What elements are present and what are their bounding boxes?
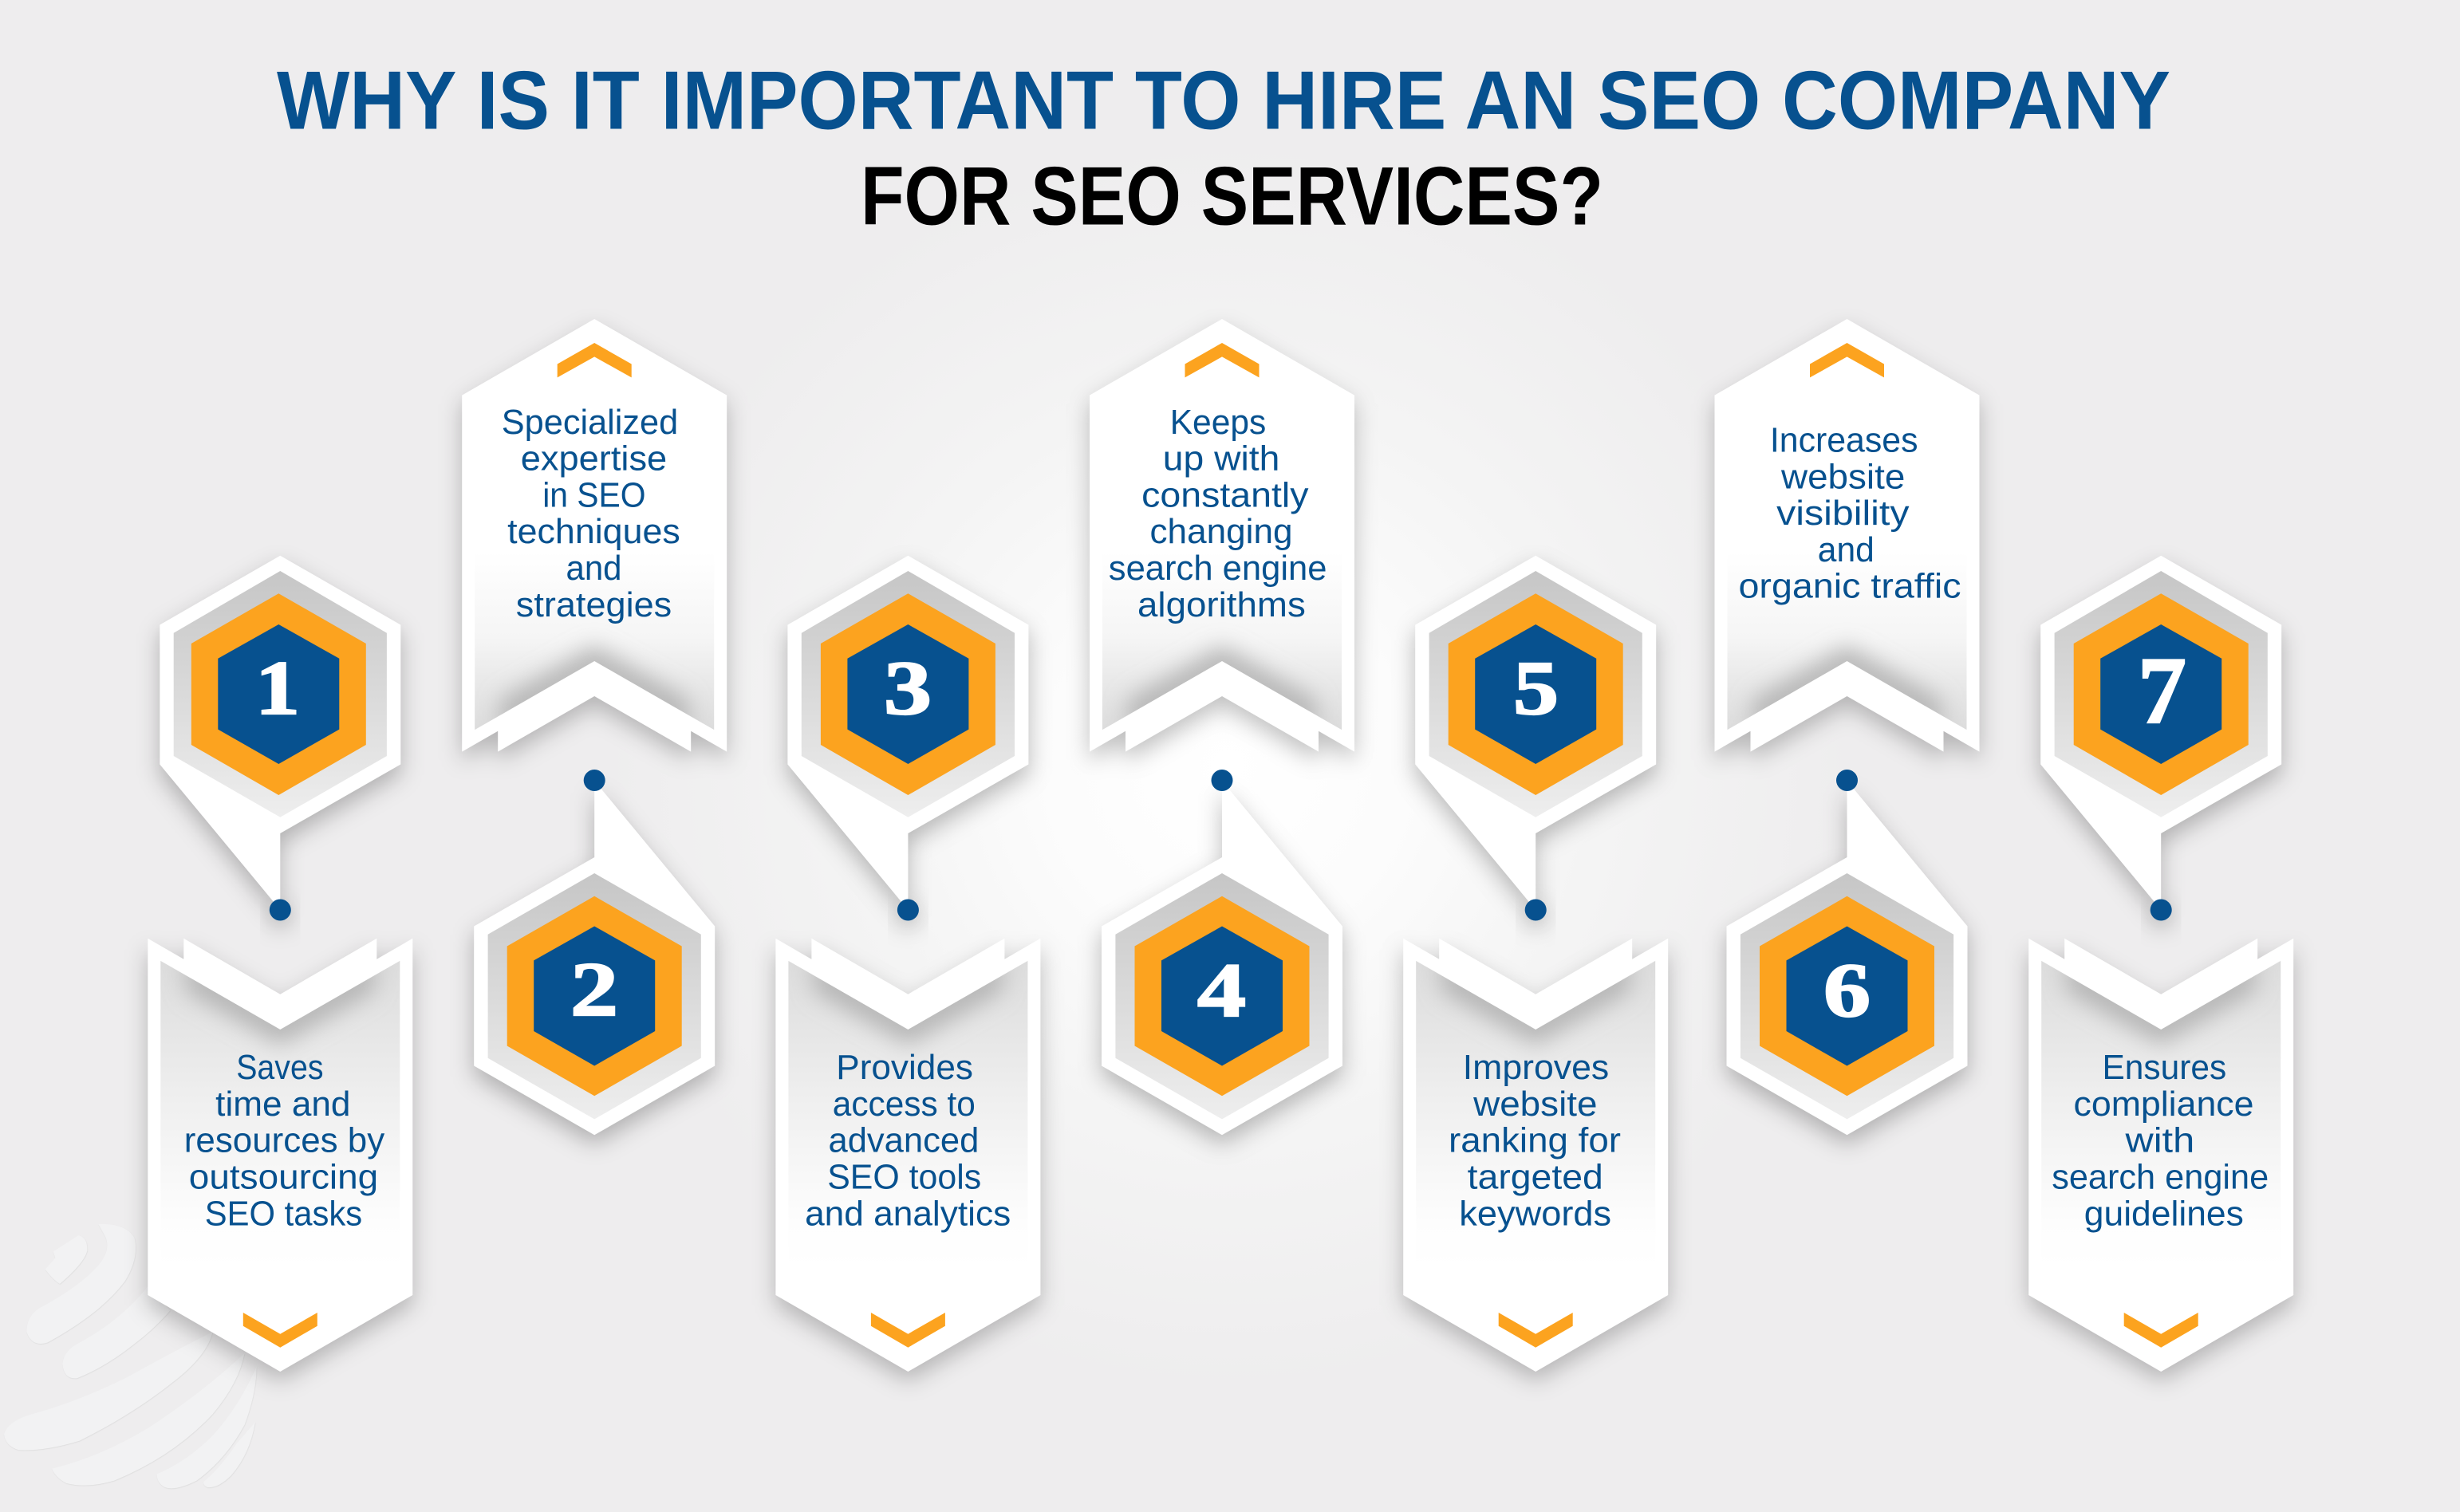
text: specialized expertise — [502, 403, 680, 624]
text: provides access: and analytics — [805, 1195, 1011, 1233]
text: provides access: advanced — [828, 1121, 979, 1160]
text: specialized expertise: Specialized — [502, 403, 678, 442]
hexagon pin 4 — [1102, 770, 1342, 1144]
text: improves ranking: Improves — [1463, 1048, 1609, 1087]
column 1 — [148, 556, 412, 1381]
text: keeps up: changing — [1150, 512, 1292, 551]
text: specialized expertise: in SEO — [542, 475, 646, 514]
text: specialized expertise: expertise — [521, 439, 667, 478]
text: saves time: Saves — [236, 1048, 324, 1087]
text: improves ranking: targeted — [1468, 1158, 1603, 1197]
text: improves ranking: ranking for — [1449, 1121, 1621, 1160]
text: keeps up: Keeps — [1170, 403, 1266, 442]
title — [277, 55, 2170, 243]
text: ensures compliance: with — [2124, 1121, 2194, 1160]
text: increases visibility: visibility — [1776, 494, 1910, 533]
text: saves time — [184, 1048, 384, 1233]
text: increases visibility: website — [1780, 457, 1905, 496]
title line 1: WHY IS IT IMPORTANT TO HIRE AN SEO COMPANY — [277, 55, 2170, 148]
decorative logo swirl — [4, 1224, 257, 1488]
text: ensures compliance — [2052, 1048, 2269, 1233]
column 3 — [775, 556, 1040, 1381]
text: increases visibility: organic traffic — [1739, 567, 1961, 606]
text: provides access — [805, 1048, 1011, 1233]
title line 2: FOR SEO SERVICES? — [861, 151, 1603, 243]
hexagon pin 2 — [474, 770, 715, 1144]
text: keeps up — [1109, 403, 1327, 624]
text: ensures compliance: compliance — [2074, 1085, 2254, 1124]
hexagon pin 7 — [2040, 556, 2281, 927]
column 6 — [1715, 319, 1980, 1144]
text: ensures compliance: search engine — [2052, 1158, 2269, 1197]
hexagon pin 6 — [1726, 770, 1967, 1144]
text: keeps up: algorithms — [1137, 585, 1306, 624]
ribbon panel 4 — [1090, 319, 1354, 762]
text: provides access: access to — [833, 1085, 976, 1124]
hexagon pin 6: 6 — [1823, 947, 1871, 1033]
text: increases visibility: Increases — [1770, 421, 1918, 460]
hexagon pin 3: 3 — [884, 645, 932, 730]
hexagon pin 7: 7 — [2138, 637, 2186, 743]
text: saves time: resources by — [184, 1121, 384, 1160]
ribbon panel 6 — [1715, 319, 1980, 762]
ribbon panel 3 — [775, 939, 1040, 1381]
text: saves time: outsourcing — [189, 1158, 378, 1197]
text: increases visibility: and — [1818, 530, 1875, 569]
text: specialized expertise: strategies — [516, 585, 672, 624]
hexagon pin 4: 4 — [1197, 947, 1246, 1033]
column 2 — [462, 319, 727, 1144]
text: improves ranking: website — [1472, 1085, 1597, 1124]
text: specialized expertise: techniques — [507, 512, 680, 551]
text: ensures compliance: Ensures — [2103, 1048, 2226, 1087]
text: provides access: Provides — [836, 1048, 973, 1087]
text: keeps up: search engine — [1109, 549, 1327, 588]
ribbon panel 2 — [462, 319, 727, 762]
text: provides access: SEO tools — [827, 1158, 981, 1197]
text: specialized expertise: and — [566, 549, 622, 588]
text: improves ranking — [1449, 1048, 1621, 1233]
text: increases visibility — [1739, 421, 1961, 606]
hexagon pin 3 — [787, 556, 1028, 927]
text: improves ranking: keywords — [1459, 1195, 1611, 1233]
ribbon panel 5 — [1403, 939, 1668, 1381]
column 4 — [1090, 319, 1354, 1144]
text: keeps up: constantly — [1141, 475, 1308, 514]
hexagon pin 1: 1 — [255, 645, 300, 730]
hexagon pin 5: 5 — [1513, 645, 1559, 730]
ribbon panel 1 — [148, 939, 412, 1381]
text: saves time: time and — [215, 1085, 351, 1124]
hexagon pin 2: 2 — [570, 947, 618, 1032]
text: keeps up: up with — [1163, 439, 1279, 478]
ribbon panel 7 — [2028, 939, 2293, 1381]
text: ensures compliance: guidelines — [2084, 1195, 2244, 1233]
column 5 — [1403, 556, 1668, 1381]
column 7 — [2028, 556, 2293, 1381]
hexagon pin 5 — [1415, 556, 1656, 927]
hexagon pin 1 — [160, 556, 400, 927]
text: saves time: SEO tasks — [205, 1195, 362, 1233]
